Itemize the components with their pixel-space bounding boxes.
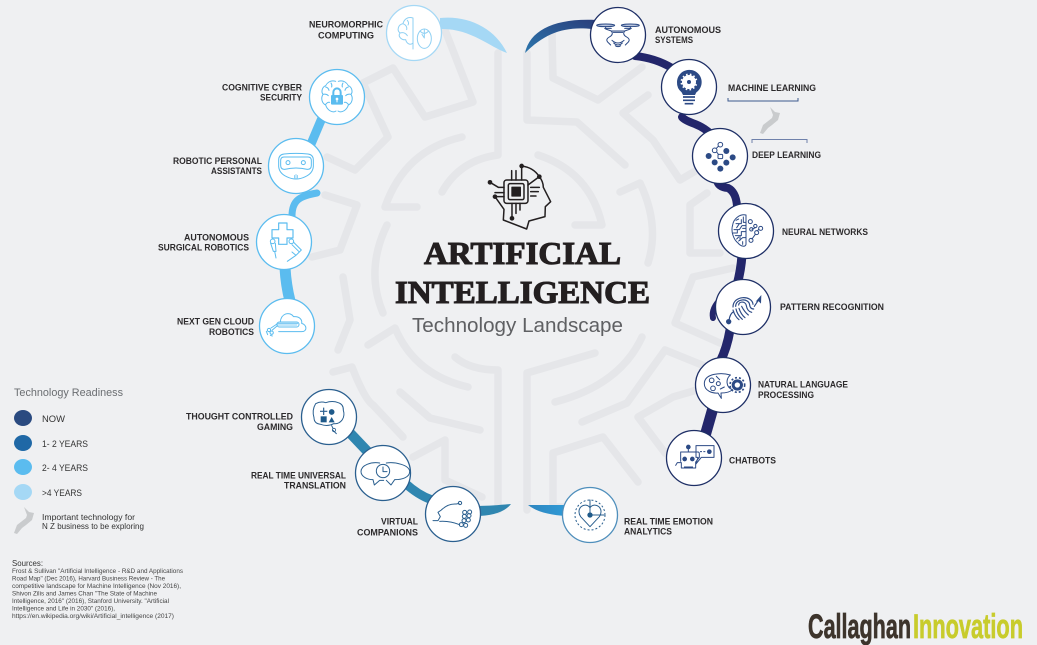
sources: Road Map" (Dec 2016), Harvard Business Review - The (12, 576, 166, 582)
node: cognitive cyber security (310, 70, 364, 124)
label: next gen cloud robotics: NEXT GEN CLOUD (177, 316, 254, 326)
legend item: now: NOW (42, 414, 66, 424)
label: pattern recognition: PATTERN RECOGNITION (780, 302, 884, 312)
label: robotic personal assistants: ASSISTANTS (211, 166, 262, 176)
label: virtual companions: VIRTUAL (381, 516, 418, 526)
legend title: Technology Readiness (14, 387, 123, 399)
node: chatbots (666, 430, 722, 486)
legend item: 2-4 years (14, 459, 88, 475)
label: real time emotion analytics: REAL TIME EMOTION (624, 516, 713, 526)
legend item: now (14, 410, 66, 426)
title: INTELLIGENCE (395, 274, 650, 310)
node: neuromorphic computing (386, 6, 442, 60)
label: cognitive cyber security: COGNITIVE CYBER (222, 82, 302, 92)
icon: AI head with chip (488, 164, 551, 229)
node: real time emotion analytics (562, 488, 618, 542)
label: virtual companions: COMPANIONS (357, 528, 418, 538)
subtitle: Technology Landscape (412, 315, 623, 337)
label: real time universal translation: TRANSLATION (284, 480, 346, 490)
label: thought controlled gaming: THOUGHT CONTROLLED (186, 412, 293, 422)
legend item: more than 4 years: >4 YEARS (42, 488, 82, 498)
sources (12, 558, 185, 620)
logo: Callaghan Innovation: Callaghan (808, 608, 911, 645)
legend (14, 387, 144, 534)
label: thought controlled gaming: GAMING (257, 422, 293, 432)
ribbon: real time emotion lead-in (528, 505, 566, 516)
legend item: 1-2 years (14, 435, 88, 451)
title: ARTIFICIAL (424, 235, 621, 271)
node: neural networks (718, 204, 774, 258)
sources: Frost & Sullivan "Artificial Intelligence - R&D and Applications (12, 569, 183, 575)
label: cognitive cyber security: SECURITY (260, 92, 302, 102)
sources: Intelligence, 2016" (2016), Stanford University. "Artificial (12, 599, 169, 605)
ribbon: now technologies (635, 56, 742, 436)
node: real time universal translation (356, 446, 410, 500)
sources: competitive landscape for Machine Intelligence (Nov 2016), (12, 584, 181, 590)
label: next gen cloud robotics: ROBOTICS (209, 327, 254, 337)
label: autonomous systems: AUTONOMOUS (655, 25, 721, 35)
label: autonomous systems: SYSTEMS (655, 35, 693, 45)
label: deep learning: DEEP LEARNING (752, 150, 821, 160)
node: natural language processing (696, 358, 750, 412)
label: neuromorphic computing: COMPUTING (318, 30, 374, 40)
bracket: deep learning (752, 140, 807, 143)
legend item: important for NZ (14, 507, 144, 534)
label: chatbots: CHATBOTS (729, 456, 776, 466)
label: autonomous surgical robotics: AUTONOMOUS (184, 232, 249, 242)
ribbon: 1-2 years left (350, 433, 511, 516)
label: real time emotion analytics: ANALYTICS (624, 526, 672, 536)
ribbon: 2-4 years (285, 118, 322, 301)
legend item: more than 4 years (14, 484, 82, 500)
legend item: important for NZ: Important technology for (42, 512, 135, 522)
icon: New Zealand map (760, 107, 780, 134)
label: autonomous surgical robotics: SURGICAL ROBOTICS (158, 242, 249, 252)
label: machine learning: MACHINE LEARNING (728, 83, 816, 93)
node: robotic personal assistants (268, 138, 324, 194)
sources: Sources: (12, 558, 43, 568)
node: next gen cloud robotics (260, 298, 314, 354)
node: machine learning (662, 60, 716, 114)
node: pattern recognition (716, 280, 770, 334)
label: natural language processing: NATURAL LANGUAGE (758, 380, 848, 390)
label: real time universal translation: REAL TIME UNIVERSAL (251, 470, 346, 480)
sources: Intelligence and Life in 2030" (2016), (12, 606, 115, 612)
node: virtual companions (426, 486, 480, 542)
background brain circuit pattern (312, 30, 733, 510)
ribbon: autonomous systems lead-in (525, 20, 596, 53)
bracket: machine learning (728, 98, 798, 101)
legend item: 1-2 years: 1- 2 YEARS (42, 439, 88, 449)
sources: Shivon Zilis and James Chan "The State of Machine (12, 592, 158, 598)
legend item: 2-4 years: 2- 4 YEARS (42, 463, 88, 473)
node: thought controlled gaming (302, 390, 356, 444)
sources: https://en.wikipedia.org/wiki/Artificial_intelligence (2017) (12, 614, 174, 620)
legend item: important for NZ: N Z business to be exploring (42, 521, 144, 531)
ribbon: more than 4 years (440, 18, 507, 53)
node: autonomous systems (590, 8, 646, 62)
label: neuromorphic computing: NEUROMORPHIC (309, 20, 383, 30)
node: deep learning (692, 128, 748, 184)
label: neural networks: NEURAL NETWORKS (782, 227, 868, 237)
label: robotic personal assistants: ROBOTIC PERSONAL (173, 156, 262, 166)
node: autonomous surgical robotics (256, 214, 312, 270)
label: natural language processing: PROCESSING (758, 390, 814, 400)
